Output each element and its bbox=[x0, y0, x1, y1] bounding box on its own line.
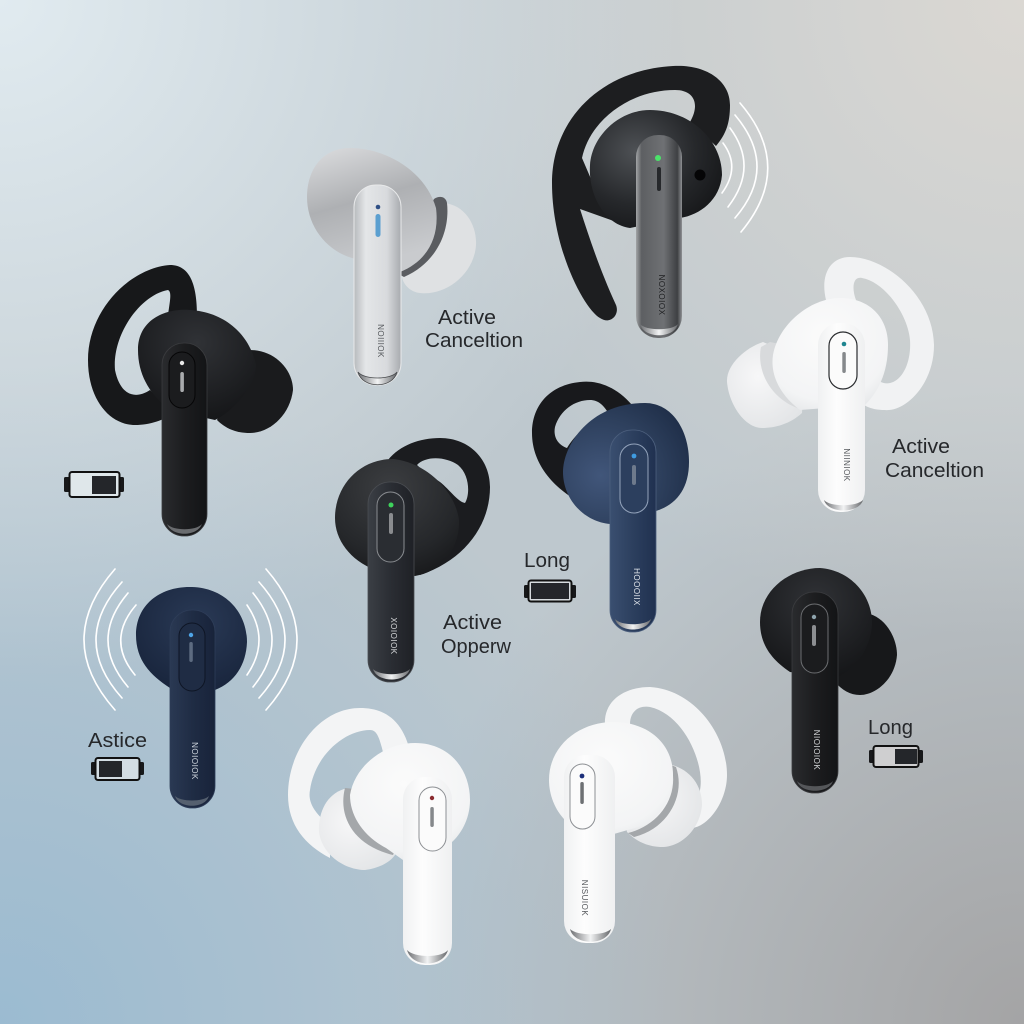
stem bbox=[354, 185, 401, 385]
button bbox=[169, 352, 195, 408]
collar bbox=[395, 197, 447, 277]
label: Active Canceltion, top centre: Canceltion bbox=[425, 330, 523, 352]
indicator light bbox=[655, 155, 661, 161]
sound waves bbox=[722, 103, 768, 232]
head bbox=[590, 110, 722, 228]
ear tip bbox=[402, 203, 476, 293]
head bbox=[136, 587, 247, 690]
brand mark: NIOIOIOK bbox=[812, 730, 821, 770]
button bbox=[801, 604, 828, 673]
ear hook bbox=[824, 257, 934, 410]
head bbox=[760, 568, 872, 678]
stem bbox=[564, 755, 615, 943]
stem bbox=[368, 482, 414, 682]
label: Active Opperw bbox=[441, 612, 512, 658]
stem bbox=[403, 777, 452, 965]
ear hook bbox=[288, 708, 412, 858]
stem bbox=[162, 343, 207, 536]
earbud: white with ear hook, bottom centre right bbox=[549, 687, 727, 943]
ear hook bbox=[605, 687, 727, 828]
earbud: graphite with ear hook, top right bbox=[552, 66, 768, 338]
head bbox=[307, 148, 437, 272]
ear hook bbox=[552, 66, 730, 320]
ear tip bbox=[620, 765, 702, 847]
earbud: black, lower right bbox=[760, 568, 897, 793]
ear tip bbox=[217, 350, 293, 433]
label: Astice: Astice bbox=[88, 730, 147, 752]
button bbox=[419, 787, 446, 851]
brand mark: NOXOIOX bbox=[657, 275, 666, 316]
ear hook bbox=[388, 438, 490, 575]
stem bbox=[818, 323, 865, 512]
label: Active Canceltion, right: Canceltion bbox=[885, 460, 984, 482]
brand mark: NOIOIOK bbox=[190, 742, 199, 780]
button bbox=[620, 444, 648, 513]
stem bbox=[792, 592, 838, 793]
label: Active Canceltion, right bbox=[885, 436, 984, 482]
icon: battery half, lower right bbox=[869, 746, 923, 767]
label: Long, centre right: Long bbox=[524, 550, 570, 572]
stem bbox=[610, 430, 656, 632]
earbud: white with ear hook, bottom centre left bbox=[288, 708, 470, 965]
stem bbox=[170, 610, 215, 808]
stem bbox=[636, 135, 682, 338]
button bbox=[570, 764, 595, 829]
ear hook bbox=[532, 382, 632, 505]
label: Long, lower right: Long bbox=[868, 717, 913, 739]
head bbox=[138, 310, 256, 420]
icon: battery half, lower left bbox=[91, 758, 144, 780]
earbud: navy with ear hook, centre right bbox=[532, 382, 689, 632]
head bbox=[563, 403, 689, 524]
ear hook bbox=[88, 265, 197, 425]
earbud: black with ear hook, left bbox=[88, 265, 293, 536]
button bbox=[829, 332, 857, 389]
label: Active Canceltion, top centre bbox=[425, 307, 523, 352]
brand mark: HOOOIIX bbox=[632, 568, 641, 606]
head bbox=[772, 298, 888, 410]
brand mark: NISUIOK bbox=[580, 880, 589, 916]
head bbox=[549, 722, 673, 838]
indicator light bbox=[376, 205, 380, 209]
earbud: white with ear hook, right bbox=[727, 257, 934, 512]
label: Active Opperw: Opperw bbox=[441, 636, 512, 658]
collar bbox=[628, 765, 679, 837]
speaker hole bbox=[694, 170, 706, 180]
label: Active Opperw: Active bbox=[443, 612, 502, 634]
brand mark: NOIIIOK bbox=[376, 324, 385, 358]
brand mark: NIINIOK bbox=[842, 448, 851, 482]
ear tip bbox=[835, 614, 897, 695]
brand mark: XOIOIOK bbox=[389, 617, 398, 655]
earbud: charcoal with ear hook, centre bbox=[335, 438, 490, 682]
icon: battery half, left bbox=[64, 472, 124, 497]
button bbox=[179, 623, 205, 691]
collar bbox=[343, 788, 400, 855]
label: Active Canceltion, right: Active bbox=[892, 436, 950, 458]
ear tip bbox=[319, 789, 400, 870]
ear tip bbox=[727, 342, 805, 428]
sound waves bbox=[84, 569, 297, 710]
icon: battery full, centre right bbox=[524, 580, 576, 602]
head bbox=[350, 743, 470, 860]
earbud: silver, top centre bbox=[307, 148, 476, 385]
button bbox=[377, 492, 404, 562]
head bbox=[335, 459, 459, 576]
earbud: navy with sound waves, left bbox=[84, 569, 297, 808]
collar bbox=[760, 342, 815, 409]
label: Active Canceltion, top centre: Active bbox=[438, 307, 496, 329]
